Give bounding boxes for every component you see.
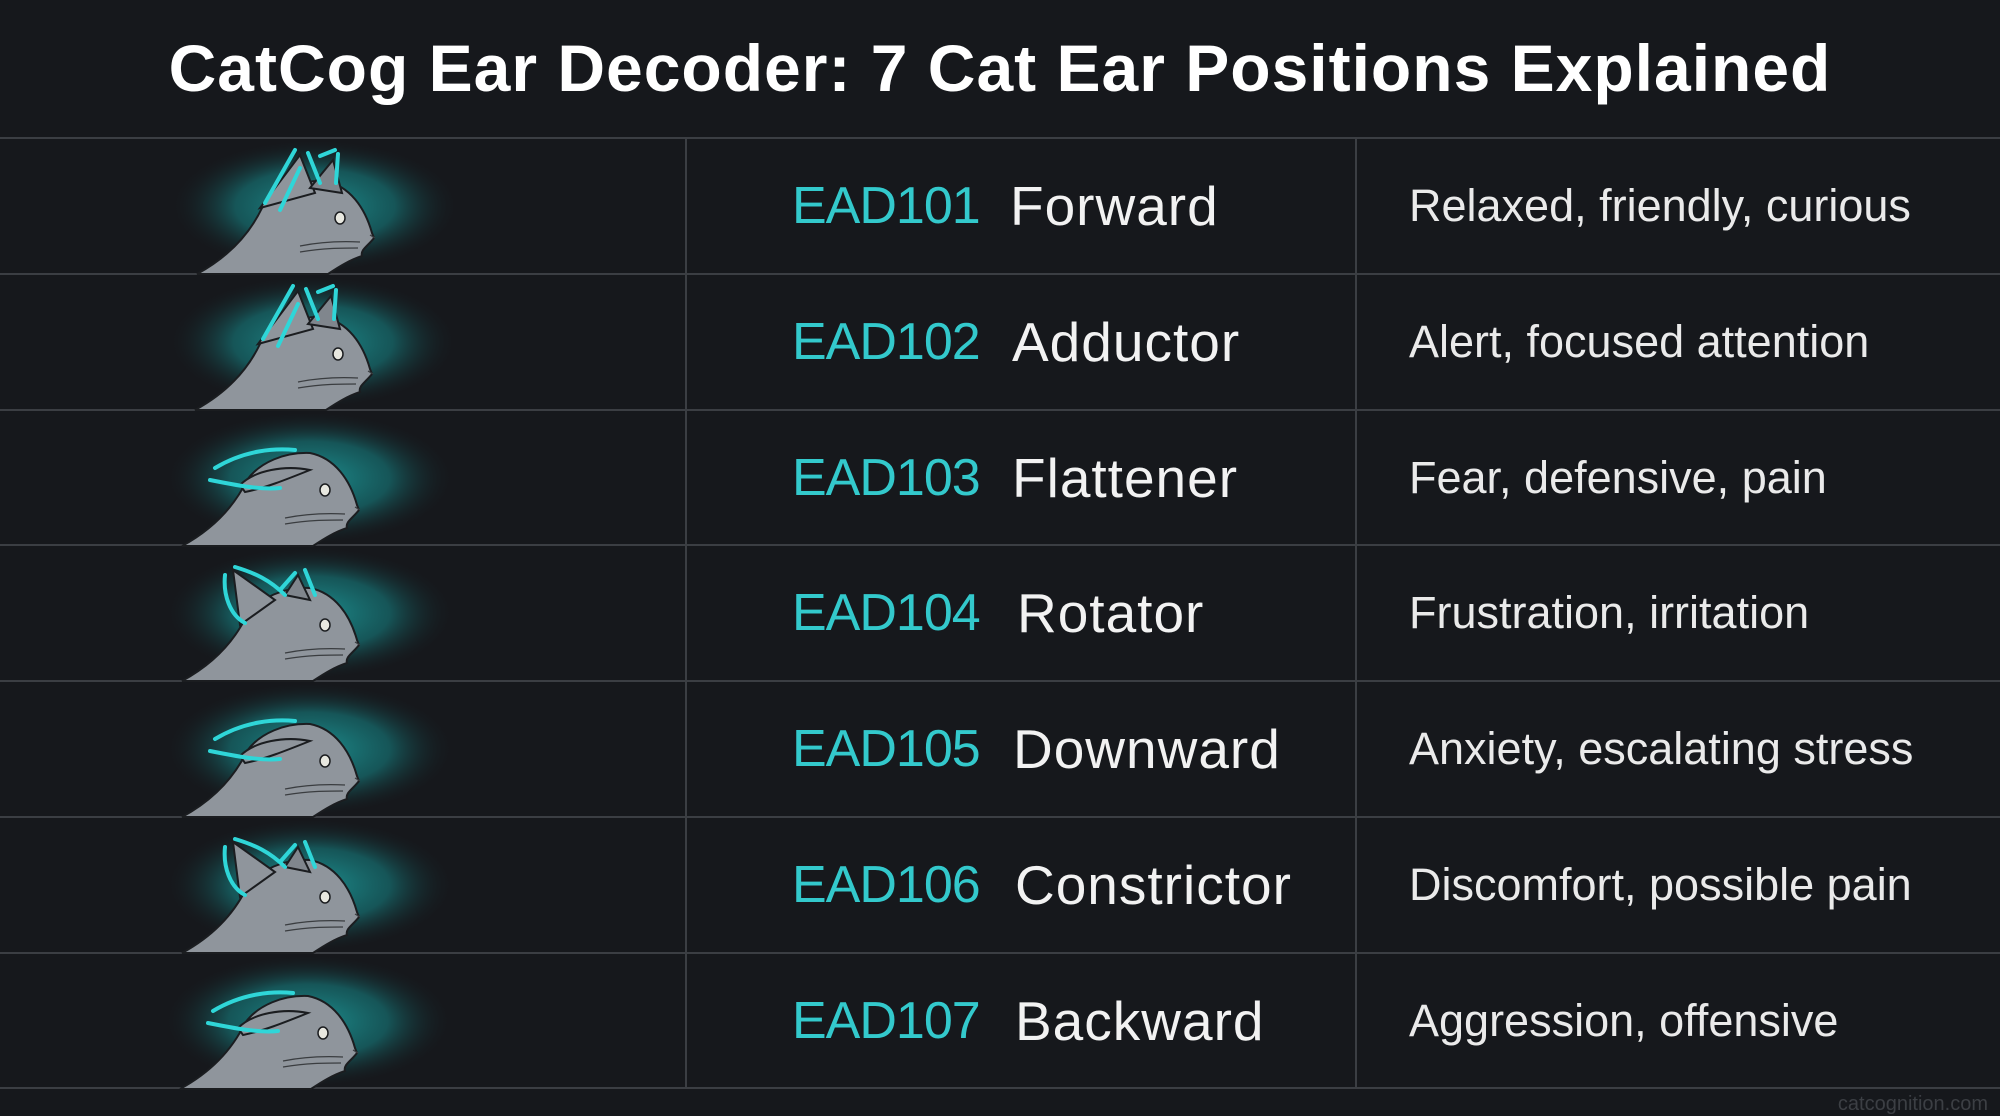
icon: cat downward	[165, 682, 455, 817]
row 1: EAD101	[792, 177, 980, 235]
row 1: Relaxed, friendly, curious	[1409, 180, 1911, 231]
row 6: Discomfort, possible pain	[1409, 859, 1912, 910]
icon: cat constrictor	[165, 818, 455, 953]
icon: cat backward	[163, 954, 453, 1089]
row 4: EAD104	[792, 584, 980, 642]
row 3: Flattener	[1012, 447, 1238, 509]
row 2	[792, 311, 1869, 373]
row 7: Backward	[1015, 990, 1264, 1052]
icon: cat adductor	[168, 275, 458, 410]
row 2: EAD102	[792, 313, 980, 371]
row 3: EAD103	[792, 449, 980, 507]
row 5: Anxiety, escalating stress	[1409, 723, 1913, 774]
row 7: EAD107	[792, 992, 980, 1050]
title: CatCog Ear Decoder: 7 Cat Ear Positions Explained	[169, 31, 1831, 105]
row 4: Frustration, irritation	[1409, 587, 1809, 638]
row 7	[792, 990, 1838, 1052]
watermark: catcognition.com	[1838, 1093, 1988, 1115]
row 1	[792, 175, 1911, 237]
row 6: Constrictor	[1015, 854, 1292, 916]
row 1: Forward	[1010, 175, 1219, 237]
row 6: EAD106	[792, 856, 980, 914]
row 7: Aggression, offensive	[1409, 995, 1838, 1046]
row 4	[792, 582, 1809, 644]
row 5: Downward	[1013, 718, 1281, 780]
row 5	[792, 718, 1913, 780]
row 3: Fear, defensive, pain	[1409, 452, 1827, 503]
row 2: Adductor	[1012, 311, 1240, 373]
row 4: Rotator	[1017, 582, 1204, 644]
icon: cat flattener	[165, 411, 455, 546]
icon: cat rotator	[165, 546, 455, 681]
icon: cat forward	[170, 139, 460, 274]
row 2: Alert, focused attention	[1409, 316, 1869, 367]
row 5: EAD105	[792, 720, 980, 778]
row 3	[792, 447, 1827, 509]
row 6	[792, 854, 1912, 916]
